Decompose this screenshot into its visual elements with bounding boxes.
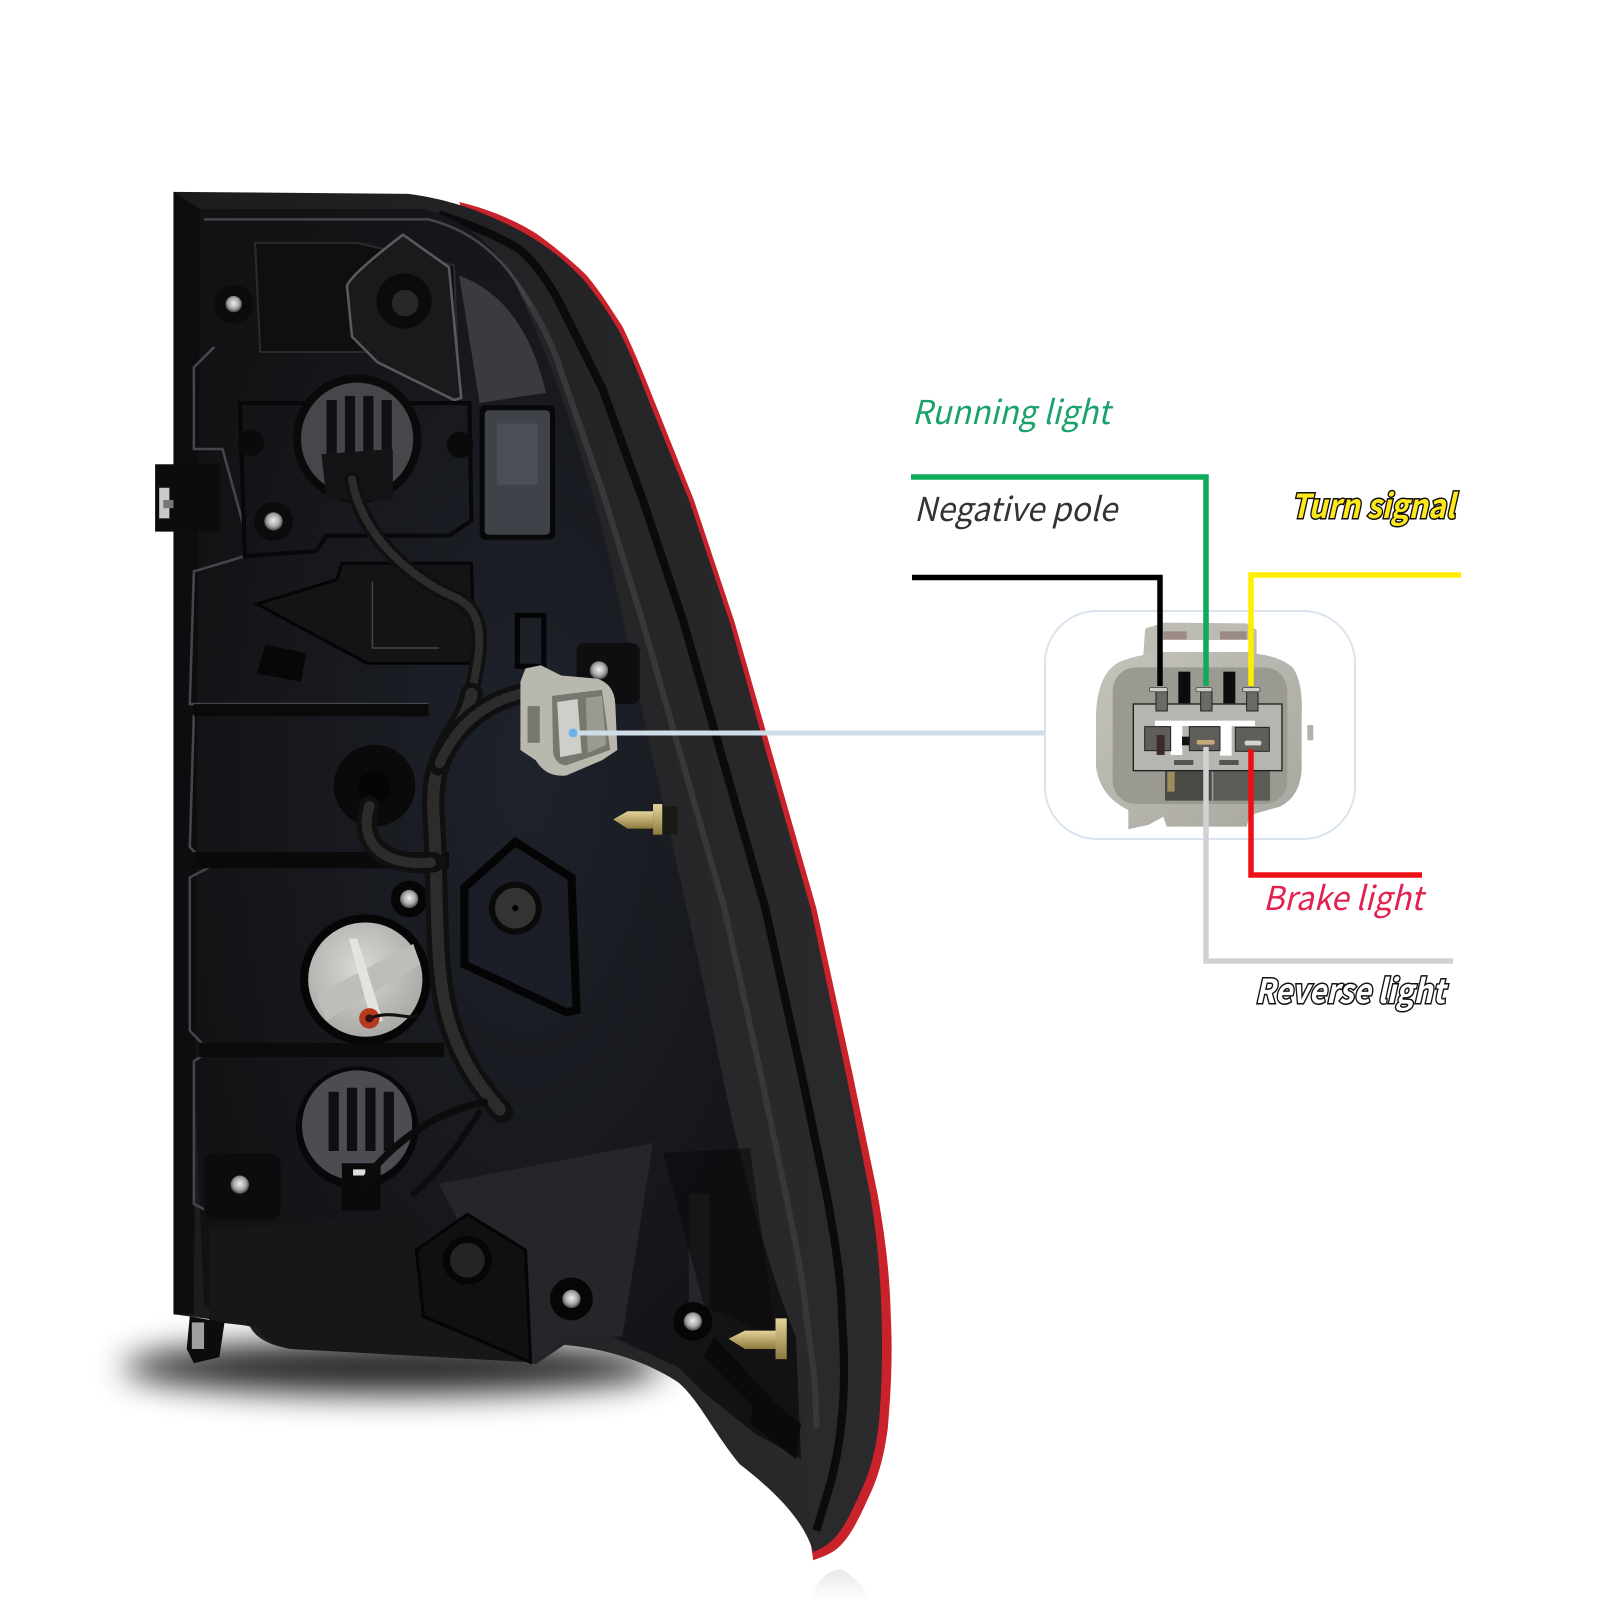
tail light photo illustration	[122, 192, 892, 1600]
lower cavity dark areas	[1165, 770, 1270, 801]
small square tab	[257, 645, 306, 682]
upper housing block	[255, 243, 459, 398]
screw bottom centre	[550, 1278, 593, 1320]
NITTO shield	[464, 842, 577, 1012]
side mounting pegs	[238, 430, 473, 458]
screw bottom right	[673, 1302, 712, 1341]
wire: brake light red	[1251, 749, 1422, 875]
wire: turn signal yellow	[1251, 575, 1461, 686]
wires	[911, 477, 1461, 961]
upper bulb socket with fins	[293, 374, 421, 503]
grey rectangular window	[480, 405, 555, 540]
moulding inner lines	[372, 582, 439, 648]
inner back panel	[192, 209, 801, 1459]
upper socket frame	[240, 403, 471, 556]
red lens rim	[459, 202, 892, 1560]
socket pins	[1157, 735, 1261, 755]
label: running light: Running light	[912, 386, 1113, 434]
reflection under tip	[811, 1569, 869, 1600]
label: brake light: Brake light	[1263, 872, 1426, 920]
right nub	[1307, 725, 1313, 740]
inner plate	[1133, 704, 1282, 771]
upper round plug	[377, 273, 432, 329]
grey bulb cap	[300, 914, 431, 1045]
gasket groove	[439, 214, 844, 1531]
enlarged connector face	[1096, 623, 1313, 829]
small wire connector on lamp	[520, 665, 617, 776]
lower mid grommet	[334, 745, 415, 827]
panel ridge lines	[190, 219, 531, 1214]
label: negative pole: Negative pole	[914, 483, 1120, 531]
left mounting tab	[155, 464, 220, 532]
bottom clip	[187, 1316, 224, 1363]
label: turn signal: Turn signal	[1291, 480, 1459, 528]
label: reverse light: Reverse light	[1255, 965, 1449, 1013]
top terminals	[1156, 692, 1258, 711]
screw centre	[391, 881, 428, 917]
white channels	[1155, 721, 1255, 756]
lower step band	[199, 1043, 444, 1057]
upper slots	[1178, 672, 1235, 703]
bottom hex shield	[416, 1214, 531, 1362]
screw by connector	[577, 643, 640, 704]
step dark band	[194, 704, 429, 716]
bottom housing block	[209, 1214, 531, 1362]
brass clip middle	[613, 804, 678, 835]
NITTO round vent	[489, 882, 542, 935]
small vertical clip	[517, 615, 544, 666]
latch window	[1158, 640, 1250, 652]
callout leader line	[573, 730, 1045, 736]
connector callout box	[1045, 611, 1355, 839]
ground shadow	[122, 1341, 663, 1394]
light wedge reflection	[459, 276, 546, 403]
latch marks	[1163, 631, 1247, 639]
connector shell	[1096, 653, 1302, 829]
upper hex shield	[347, 235, 461, 400]
lower sockets	[1145, 727, 1269, 751]
wire: running light green	[911, 477, 1206, 686]
terminal caps	[1149, 688, 1260, 692]
leader start dot	[568, 728, 578, 738]
connector latch	[1143, 623, 1257, 655]
lower bulb socket with fins	[296, 1066, 418, 1189]
brass clip bottom	[729, 1318, 787, 1359]
gasket highlight	[449, 230, 816, 1429]
bottom centre panel	[439, 1143, 653, 1362]
wiring harness	[352, 480, 520, 1194]
screw lower left	[204, 1153, 281, 1219]
wire: reverse light grey	[1206, 747, 1453, 961]
cavity	[1113, 667, 1287, 804]
labels	[912, 386, 1459, 1013]
small plate marks	[1174, 760, 1239, 765]
lower bulb plug	[342, 1163, 381, 1210]
housing and gasket	[173, 192, 882, 1552]
bottom round plug	[443, 1236, 492, 1285]
screw upper socket	[254, 502, 293, 541]
screw top left	[214, 285, 253, 323]
mid wedge moulding	[257, 563, 474, 663]
panel left strip	[173, 192, 200, 1314]
mid step band	[194, 852, 449, 868]
lower right ridges	[663, 1148, 801, 1459]
wire: negative pole black	[912, 578, 1160, 686]
